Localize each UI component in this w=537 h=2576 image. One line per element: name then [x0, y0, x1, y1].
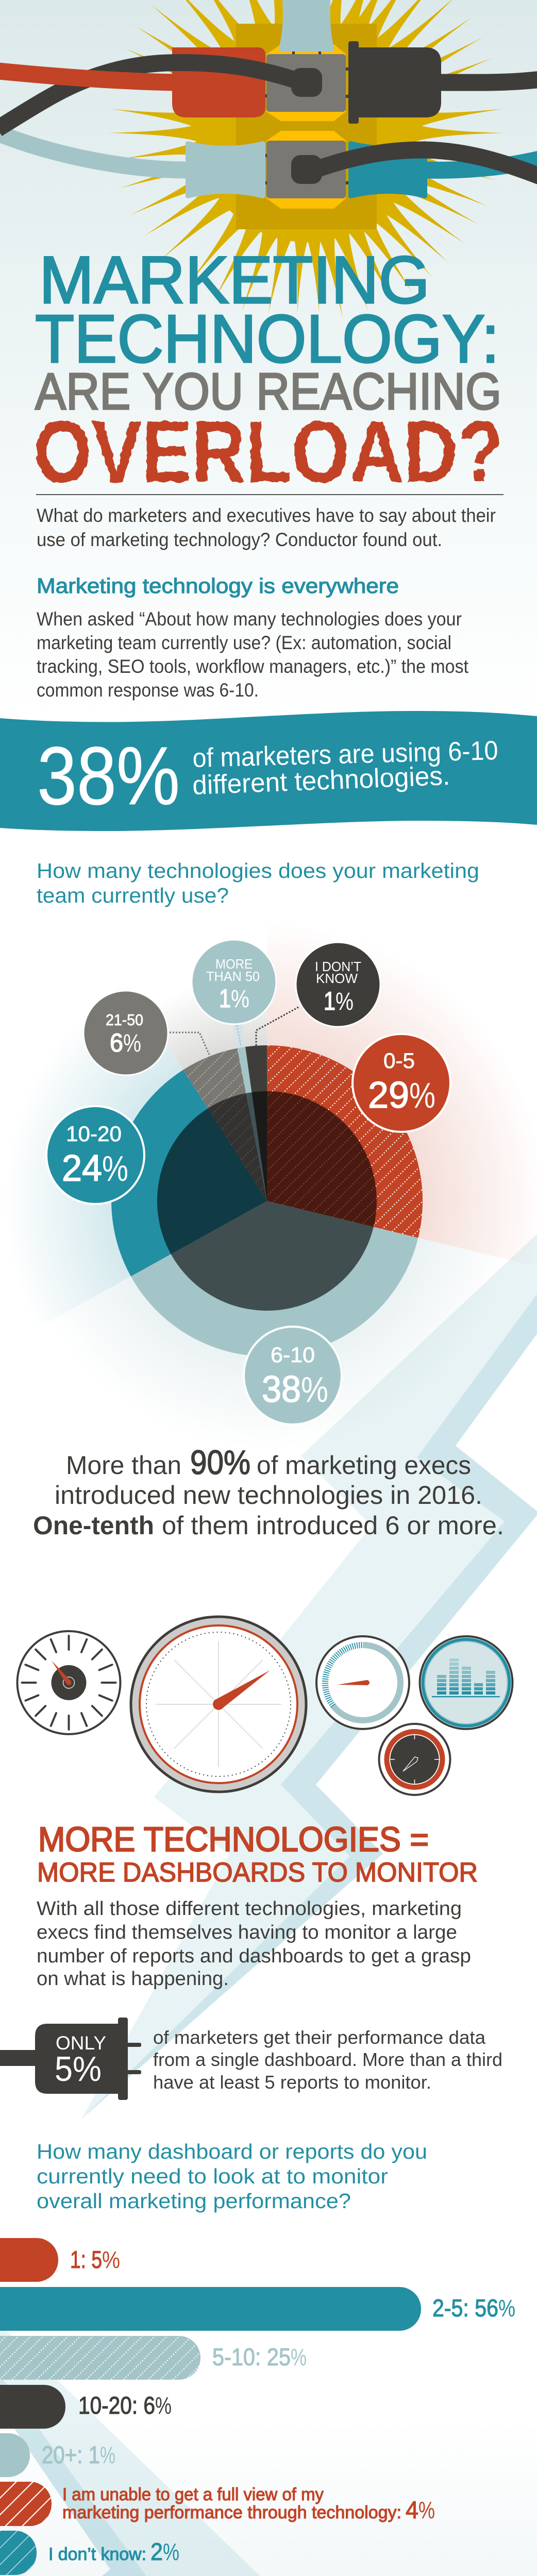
body text: dashboards [37, 1898, 471, 1990]
bubble: 0-5 29% [353, 1034, 450, 1132]
question paragraph: tracking, SEO tools, workflow managers, etc.)” the most [37, 656, 469, 677]
bar: unable to get full view 4%: marketing performance through technology: [62, 2503, 401, 2522]
bubble: 0-5 29%: 0-5 [383, 1048, 415, 1073]
divider rule [36, 494, 504, 495]
title: ARE YOU REACHING [35, 363, 501, 420]
black cable from left [0, 62, 322, 129]
body text: dashboards: on what is happening. [37, 1968, 229, 1990]
heading: more technologies = more dashboards [37, 1820, 478, 1888]
intro text: What do marketers and executives have to say about their [37, 505, 496, 526]
slice: I don't know [245, 1045, 267, 1201]
callout text [153, 2027, 502, 2093]
bubble: 21-50 6%: 6 [110, 1028, 123, 1057]
bar: 20+: 1% [0, 2433, 115, 2477]
heading: how many technologies: team currently use? [37, 884, 229, 907]
bubble: 6-10 38%: 6-10 [271, 1343, 315, 1367]
intro text: use of marketing technology? Conductor found out. [37, 529, 442, 550]
spark burst [109, 0, 505, 321]
bar: I don't know 2%: I don’t know: [48, 2545, 146, 2564]
bar: 2-5: 56%: % [498, 2295, 515, 2321]
dial: small dark clock [379, 1724, 450, 1795]
bubble: 0-5 29%: 29 [368, 1075, 409, 1116]
bar: 10-20: 6% [0, 2385, 172, 2429]
bubble: I don't know 1% [296, 942, 380, 1027]
heading: how many technologies: How many technologies does your marketing [37, 859, 479, 883]
background zigzag lower [0, 2325, 485, 2576]
dial: progress gauge [316, 1636, 409, 1729]
light blue left plug and cable [0, 133, 265, 198]
dial: ticks with hub [18, 1631, 121, 1734]
bar: I don't know 2%: 2 [150, 2538, 163, 2565]
bar: unable to get full view 4%: 4 [406, 2496, 418, 2523]
dial: equalizer [419, 1636, 512, 1729]
bubble: more than 50 1%: THAN 50 [206, 969, 260, 984]
bubble: 6-10 38%: % [301, 1369, 328, 1410]
stat text: 90% introduced new technologies: 90% [190, 1443, 250, 1481]
bar: 1: 5%: 1: 5 [70, 2246, 102, 2273]
bubble: 21-50 6%: 21-50 [106, 1011, 143, 1029]
body text: dashboards: With all those different technologies, marketing [37, 1898, 462, 1920]
bar: 20+: 1%: 20+: 1 [42, 2441, 100, 2468]
bar: 5-10: 25% [0, 2336, 307, 2380]
plug callout: only 5%: 5% [55, 2049, 102, 2089]
body text: dashboards: execs find themselves having to monitor a large [37, 1922, 457, 1943]
callout text: of marketers get their performance data [153, 2027, 486, 2048]
bubble: I don't know 1%: 1 [324, 987, 335, 1015]
bubble: I don't know 1%: % [335, 988, 354, 1015]
bar: 5-10: 25%: % [291, 2344, 307, 2370]
bar: unable to get full view 4%: % [418, 2497, 435, 2523]
lower black cable [291, 150, 537, 184]
plug callout: only 5% [0, 2018, 141, 2100]
dial: large clock [131, 1617, 306, 1792]
bar: 1: 5%: % [102, 2246, 120, 2273]
glow wedges [0, 892, 537, 1510]
slice: 6-10 [131, 1201, 418, 1357]
bar: I don't know 2%: % [163, 2538, 179, 2565]
bar: 1: 5% [0, 2238, 120, 2282]
title: TECHNOLOGY: [35, 301, 499, 377]
teal banner: 38%: different technologies. [192, 761, 450, 801]
bubble: 10-20 24%: 24 [62, 1148, 102, 1189]
slice: 0-5 [267, 1045, 423, 1238]
slice: more than 50 [237, 1047, 267, 1201]
stat text: 90% introduced new technologies: introduced new technologies in 2016. [55, 1481, 482, 1510]
red plug [172, 47, 265, 117]
slice hatching [183, 1045, 423, 1238]
dials illustration [18, 1617, 512, 1795]
heading: how many dashboards: overall marketing performance? [37, 2189, 351, 2213]
stat text: 90% introduced new technologies: of them introduced 6 or more. [162, 1511, 504, 1540]
bar: 10-20: 6%: 10-20: 6 [78, 2392, 155, 2419]
bar: I don't know 2% [0, 2531, 179, 2575]
bubble: 0-5 29%: % [409, 1075, 435, 1115]
bubble: 10-20 24%: 10-20 [66, 1122, 122, 1146]
slice: 10-20 [111, 1070, 267, 1276]
heading: how many technologies [37, 859, 479, 907]
red cable [0, 71, 175, 82]
stat text: 90% introduced new technologies [33, 1443, 504, 1540]
body text: dashboards: number of reports and dashboards to get a grasp [37, 1945, 471, 1967]
heading: marketing technology is everywhere: Marketing technology is everywhere [37, 574, 399, 598]
bar: 2-5: 56% [0, 2287, 515, 2331]
question paragraph [37, 608, 469, 701]
bubble: 10-20 24% [46, 1106, 144, 1204]
heading: how many dashboards: currently need to look at to monitor [37, 2164, 388, 2188]
bubble: more than 50 1%: % [231, 986, 249, 1013]
bubble: I don't know 1%: KNOW [316, 971, 358, 986]
bubble: 21-50 6% [83, 991, 168, 1075]
callout text: from a single dashboard. More than a third [153, 2049, 502, 2070]
heading: how many dashboards [37, 2140, 427, 2213]
black right plug [348, 41, 537, 124]
stat text: 90% introduced new technologies: More than [66, 1451, 181, 1480]
bar chart: dashboards [0, 2238, 515, 2575]
bubble: more than 50 1%: MORE [215, 956, 253, 972]
heading: how many dashboards: How many dashboard or reports do you [37, 2140, 427, 2163]
bar: 5-10: 25%: 5-10: 25 [212, 2343, 291, 2370]
hero illustration: plugs and spark [0, 0, 537, 321]
bubble: 6-10 38% [244, 1327, 342, 1425]
bubble: I don't know 1%: I DON’T [315, 959, 361, 974]
stat text: 90% introduced new technologies: of marketing execs [257, 1451, 471, 1480]
plug callout: only 5%: ONLY [56, 2032, 106, 2054]
sockets [264, 44, 349, 209]
bubble: 10-20 24%: % [102, 1148, 128, 1189]
teal banner: 38% [0, 711, 537, 831]
question paragraph: common response was 6-10. [37, 680, 259, 701]
teal banner: 38%: of marketers are using 6-10 [192, 736, 498, 773]
slice: 21-50 [183, 1048, 267, 1201]
question paragraph: marketing team currently use? (Ex: automation, social [37, 632, 451, 653]
leader lines [170, 1007, 298, 1056]
stat text: 90% introduced new technologies: One-tenth [33, 1511, 154, 1540]
bar: 20+: 1%: % [100, 2442, 115, 2468]
bar: 10-20: 6%: % [155, 2392, 172, 2419]
bubble: 6-10 38%: 38 [262, 1369, 301, 1410]
inner dark circle [157, 1091, 377, 1311]
bar: unable to get full view 4% [0, 2482, 435, 2526]
pie chart: technologies used [0, 892, 537, 1510]
teal right plug and cable [348, 141, 537, 198]
callout text: have at least 5 reports to monitor. [153, 2072, 431, 2093]
intro text [37, 505, 496, 550]
bar: 2-5: 56%: 2-5: 56 [432, 2294, 498, 2321]
title [33, 242, 504, 501]
bubble: more than 50 1%: 1 [219, 984, 231, 1013]
bubble: more than 50 1% [192, 940, 276, 1024]
title: MARKETING [39, 242, 430, 317]
question paragraph: When asked “About how many technologies does your [37, 608, 462, 630]
background zigzag upper [81, 1234, 537, 2119]
heading: more technologies = more dashboards: MORE TECHNOLOGIES = [38, 1820, 429, 1859]
teal banner: 38%: 38% [37, 730, 180, 822]
heading: more technologies = more dashboards: MORE DASHBOARDS TO MONITOR [37, 1857, 478, 1888]
bar: unable to get full view 4%: I am unable to get a full view of my [62, 2485, 324, 2504]
light blue top plug [279, 0, 334, 52]
bubble: 21-50 6%: % [123, 1030, 141, 1057]
